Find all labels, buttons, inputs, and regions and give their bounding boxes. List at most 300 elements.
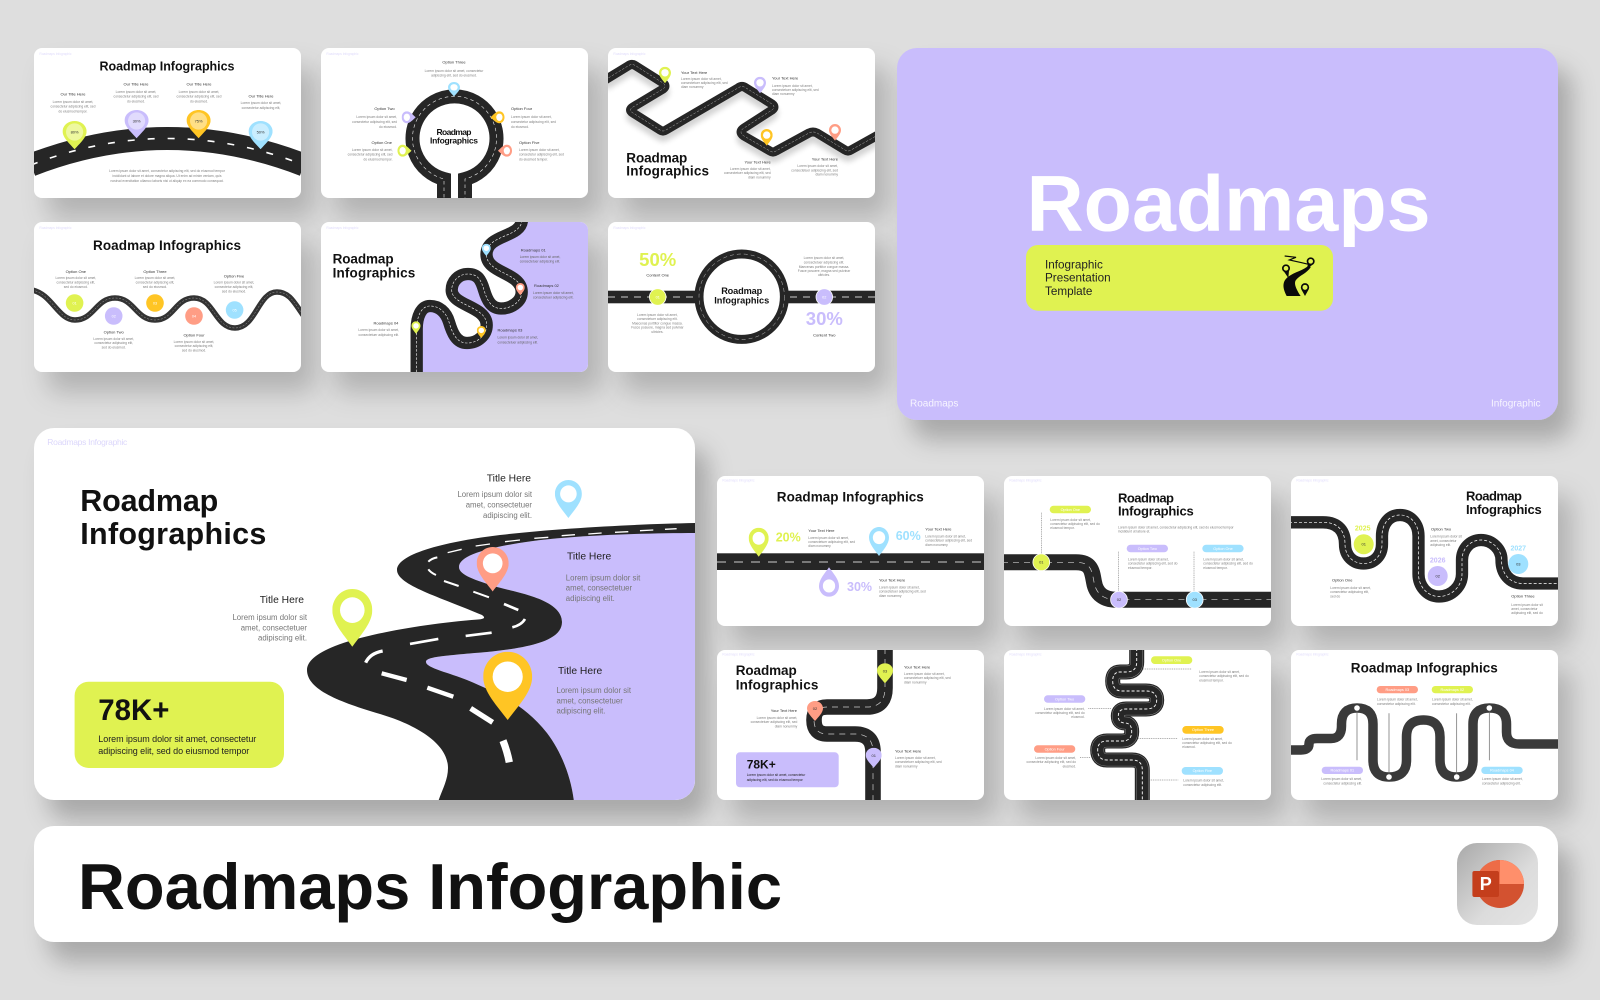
body text left: Fusce posuere, magna sed pulvinar bbox=[631, 326, 685, 330]
text two: diam nonummy bbox=[772, 92, 795, 96]
text left: consectetuer adipiscing elit, sed bbox=[751, 720, 797, 724]
roadmaps 02: Roadmaps 02 bbox=[534, 283, 560, 288]
option two: adipiscing elit. bbox=[1430, 543, 1451, 547]
watermark: Roadmaps Infographic bbox=[613, 52, 646, 56]
option four: do eiusmod. bbox=[511, 125, 529, 129]
wave road bbox=[32, 290, 303, 328]
label two bbox=[114, 82, 159, 104]
label lime: Title Here bbox=[260, 595, 304, 606]
heading: Roadmap bbox=[626, 150, 687, 165]
option two: Lorem ipsum dolor sit amet, bbox=[1044, 707, 1085, 711]
heading bbox=[333, 251, 415, 281]
option three: consectetur adipiscing elit, bbox=[136, 280, 174, 284]
option three: Option Three bbox=[442, 60, 466, 65]
pin 01 bbox=[866, 748, 882, 768]
label top: Title Here bbox=[487, 474, 531, 484]
body text right bbox=[798, 256, 851, 277]
pin 01: 01 bbox=[871, 753, 877, 758]
body text right: Fusce posuere, magna sed pulvinar bbox=[798, 269, 851, 273]
option four: Lorem ipsum dolor sit amet, bbox=[511, 115, 552, 119]
subtitle text: Template bbox=[1045, 285, 1092, 298]
option two: Option Two bbox=[1055, 697, 1074, 701]
text three: Your Text Here bbox=[744, 159, 771, 164]
watermark: Roadmaps Infographic bbox=[326, 52, 359, 56]
subtitle text: Infographic bbox=[1045, 258, 1103, 272]
text four: diam nonummy bbox=[815, 172, 838, 176]
option five: Option Five bbox=[224, 273, 245, 278]
bottom paragraph: incididunt ut labore et dolore magna aliqua. Ut enim ad minim veniam, quis bbox=[112, 174, 222, 178]
option three: Option Three bbox=[1192, 728, 1214, 732]
option one: sed do bbox=[1330, 594, 1340, 598]
option one: Option One bbox=[1061, 508, 1080, 512]
option three: adipiscing elit, sed do bbox=[1511, 611, 1543, 615]
label three: do eiusmod. bbox=[190, 100, 208, 104]
text two: Your Text Here bbox=[772, 76, 799, 81]
option five: consectetur adipiscing elit, sed bbox=[519, 152, 564, 156]
text bottom right: diam nonummy bbox=[895, 764, 918, 768]
year 2026: 02 bbox=[1435, 573, 1441, 578]
option four: Option Four bbox=[511, 106, 533, 111]
pin 02 bbox=[807, 701, 823, 721]
pin coral bbox=[477, 547, 509, 592]
label four: consectetur adipiscing elit, bbox=[242, 106, 280, 110]
centre title: Infographics bbox=[714, 295, 769, 305]
stat box: Lorem ipsum dolor sit amet, consectetur bbox=[747, 773, 806, 777]
option four: Option Four bbox=[1045, 747, 1065, 751]
watermark: Roadmaps Infographic bbox=[722, 479, 755, 483]
roadmaps 02 bbox=[1432, 686, 1473, 706]
panel: serpentine road slide bbox=[1004, 648, 1271, 802]
option five: Option Five bbox=[519, 140, 540, 145]
heading: Roadmap bbox=[1118, 490, 1174, 505]
option three: Lorem ipsum dolor sit amet, consectetur bbox=[425, 69, 484, 73]
panel: s-bend road slide bbox=[1002, 476, 1273, 626]
body text right: consectetuer adipiscing elit. bbox=[804, 260, 844, 264]
option four: consectetur adipiscing elit, bbox=[175, 344, 213, 348]
option four bbox=[1027, 745, 1076, 768]
option two: Lorem ipsum dolor sit amet, bbox=[93, 337, 134, 341]
option one blue: consectetur adipiscing elit, sed do bbox=[1203, 562, 1253, 566]
heading: Roadmap Infographics bbox=[777, 490, 924, 505]
bottom paragraph: nostrud exercitation ullamco laboris nisi ut aliquip ex ea commodo consequat. bbox=[110, 179, 224, 183]
year 2025: 01 bbox=[1361, 542, 1367, 547]
option one bbox=[1151, 656, 1249, 682]
option three bbox=[1182, 726, 1232, 749]
heading: Roadmap bbox=[1466, 489, 1522, 504]
text one: consectetuer adipiscing elit, sed bbox=[681, 81, 728, 85]
stat 60%: Your Text Here bbox=[925, 527, 952, 532]
heading: Roadmap Infographics bbox=[93, 238, 241, 253]
heading: Roadmap bbox=[333, 251, 394, 266]
centre title: Infographics bbox=[430, 136, 478, 146]
step 03 bbox=[146, 294, 164, 312]
option one: Option One bbox=[372, 140, 393, 145]
option one bbox=[1330, 577, 1371, 598]
option two: Option Two bbox=[374, 106, 395, 111]
option one: Option One bbox=[66, 269, 87, 274]
marker 02: 02 bbox=[1117, 597, 1122, 602]
option three: eiusmod. bbox=[1182, 745, 1196, 749]
heading: Infographics bbox=[1118, 504, 1194, 519]
option one blue: Lorem ipsum dolor sit amet, bbox=[1203, 558, 1244, 562]
heading: Roadmap Infographics bbox=[1351, 660, 1498, 675]
option three: Lorem ipsum dolor sit bbox=[1511, 603, 1543, 607]
roadmaps 02: consectetur adipiscing elit. bbox=[1432, 702, 1471, 706]
option three bbox=[1511, 594, 1543, 615]
card background bbox=[1004, 476, 1271, 626]
year 2025 bbox=[1354, 526, 1374, 554]
purple area bbox=[417, 220, 590, 374]
roadmaps 04: Lorem ipsum dolor sit amet, bbox=[1482, 777, 1523, 781]
year 2027: 03 bbox=[1516, 561, 1521, 566]
option one: consectetur adipiscing elit, bbox=[56, 280, 95, 284]
label three: Our Title Here bbox=[187, 82, 212, 87]
text top right bbox=[904, 664, 951, 684]
option one: eiusmod tempor. bbox=[1050, 526, 1075, 530]
stat 20% bbox=[776, 528, 855, 548]
pin blue bbox=[448, 82, 460, 96]
step 05 bbox=[226, 301, 243, 319]
stat 60%: 60% bbox=[896, 529, 921, 543]
step 01: 01 bbox=[72, 301, 77, 305]
stat 60% bbox=[896, 527, 972, 547]
heading: Infographics bbox=[1466, 502, 1542, 517]
text left bbox=[751, 708, 798, 728]
stat 30%: Your Text Here bbox=[879, 577, 906, 582]
option two bbox=[352, 106, 397, 129]
roadmaps 04: consectetuer adipiscing elit. bbox=[358, 333, 399, 337]
stat 30% bbox=[847, 577, 926, 598]
label yellow: amet, consectetuer bbox=[556, 696, 623, 705]
card background bbox=[34, 222, 301, 372]
roadmaps 02: Lorem ipsum dolor sit amet, bbox=[533, 291, 574, 295]
option one: consectetur adipiscing elit, bbox=[1330, 590, 1369, 594]
cover background bbox=[897, 48, 1558, 420]
option three: Lorem ipsum dolor sit amet, bbox=[1182, 737, 1223, 741]
text three: consectetuer adipiscing elit, sed bbox=[724, 171, 771, 175]
panel: purple stat road slide bbox=[717, 648, 984, 802]
stat 30%: consectetuer adipiscing elit, sed bbox=[879, 590, 926, 594]
guide lines bbox=[1041, 513, 1194, 592]
marker 02: 02 bbox=[822, 295, 826, 299]
year 2026 bbox=[1428, 558, 1448, 586]
icon: PowerPoint: P bbox=[1480, 874, 1492, 894]
connector lines bbox=[1080, 669, 1192, 780]
option three: amet, consectetur bbox=[1511, 607, 1538, 611]
option one: Lorem ipsum dolor sit amet, bbox=[1050, 518, 1091, 522]
stat 30%: 30% bbox=[806, 308, 843, 329]
option five: Option Five bbox=[1193, 769, 1212, 773]
heading: Infographics bbox=[736, 677, 818, 692]
option one: Lorem ipsum dolor sit amet, bbox=[55, 276, 96, 280]
label coral: amet, consectetuer bbox=[566, 584, 633, 593]
marker lines bbox=[1357, 707, 1489, 777]
stat 20%: diam nonummy bbox=[808, 544, 831, 548]
bottom paragraph: Lorem ipsum dolor sit amet, consectetur adipiscing elit, sed do eiusmod tempor bbox=[109, 169, 226, 173]
roadmaps 04: Roadmaps 04 bbox=[373, 320, 399, 325]
icon: road with pins bbox=[1283, 256, 1314, 296]
pin 75%: 75% bbox=[195, 119, 203, 124]
option three: consectetur adipiscing elit, sed do bbox=[1182, 741, 1232, 745]
intro text bbox=[1118, 526, 1235, 534]
pin 50%: 50% bbox=[257, 130, 265, 135]
card background bbox=[34, 48, 301, 198]
option two: Lorem ipsum dolor sit bbox=[1430, 534, 1462, 538]
heading bbox=[80, 484, 266, 551]
label yellow: Title Here bbox=[558, 666, 603, 677]
panel: zigzag road slide bbox=[605, 48, 878, 198]
step 01 bbox=[66, 294, 83, 312]
stat box: 78K+ bbox=[747, 757, 776, 771]
watermark: Roadmaps Infographic bbox=[1009, 653, 1042, 657]
text left: diam nonummy bbox=[775, 724, 798, 728]
pin lime bbox=[397, 145, 412, 157]
stat 60%: Lorem ipsum dolor sit amet, bbox=[925, 534, 966, 538]
option three: Option Three bbox=[143, 269, 167, 274]
label yellow: adipiscing elit. bbox=[556, 707, 605, 716]
subtitle text bbox=[1045, 258, 1111, 298]
body text right: Maecenas porttitor congue massa. bbox=[799, 265, 849, 269]
stat box: 78K+ bbox=[98, 694, 169, 727]
option one: Lorem ipsum dolor sit amet, bbox=[1330, 586, 1371, 590]
option two: Lorem ipsum dolor sit amet, bbox=[1128, 558, 1169, 562]
pin coral bbox=[498, 145, 512, 157]
pin blue bbox=[482, 244, 491, 256]
heading: Roadmap bbox=[736, 663, 797, 678]
card background bbox=[608, 222, 875, 372]
marker 03 bbox=[1186, 591, 1203, 608]
pin 80%: 80% bbox=[71, 130, 79, 135]
card background bbox=[1004, 650, 1271, 800]
option two: consectetur adipiscing elit, sed do bbox=[1128, 562, 1178, 566]
heading bbox=[626, 150, 709, 179]
roadmaps 03 bbox=[498, 328, 538, 344]
option two: Option Two bbox=[104, 330, 125, 335]
watermark: Roadmaps Infographic bbox=[1296, 479, 1329, 483]
card background bbox=[321, 222, 588, 372]
option one: sed do eiusmod. bbox=[64, 285, 88, 289]
stat box: adipiscing elit, sed do eiusmod tempor bbox=[747, 778, 804, 782]
option four: sed do eiusmod. bbox=[182, 348, 206, 352]
step 02: 02 bbox=[112, 314, 116, 318]
option five: sed do eiusmod. bbox=[222, 290, 246, 294]
panel: winding road on purple slide bbox=[321, 220, 590, 374]
text bottom right: consectetuer adipiscing elit, sed bbox=[895, 760, 942, 764]
option two: consectetur adipiscing elit, sed bbox=[352, 120, 397, 124]
panel: switchback road slide bbox=[1289, 650, 1560, 800]
card background bbox=[717, 476, 984, 626]
pin yellow bbox=[490, 111, 505, 123]
heading bbox=[1466, 489, 1542, 517]
watermark: Roadmaps Infographic bbox=[722, 653, 755, 657]
pin yellow bbox=[483, 652, 532, 720]
roadmaps 03: Roadmaps 03 bbox=[1385, 688, 1409, 692]
pin 02: 02 bbox=[813, 706, 818, 711]
body text left: ultricies. bbox=[651, 330, 664, 334]
text one: Your Text Here bbox=[681, 70, 708, 75]
label top: adipiscing elit. bbox=[483, 511, 532, 520]
text two bbox=[772, 76, 819, 96]
pin lime bbox=[749, 528, 769, 557]
roadmaps 04: consectetur adipiscing elit. bbox=[1482, 782, 1521, 786]
label lime: amet, consectetuer bbox=[241, 623, 307, 632]
marker 02 bbox=[1111, 591, 1127, 608]
stat 30%: Lorem ipsum dolor sit amet, bbox=[879, 586, 920, 590]
option five bbox=[519, 140, 564, 162]
option one bbox=[348, 140, 393, 162]
label top bbox=[457, 474, 533, 520]
marker 01: 01 bbox=[656, 295, 660, 299]
roadmaps 02 bbox=[533, 283, 574, 300]
roadmaps 01: Lorem ipsum dolor sit amet, bbox=[1321, 777, 1362, 781]
marker 01 bbox=[1033, 554, 1050, 571]
panel: arc road slide bbox=[31, 48, 304, 198]
heading: Infographics bbox=[80, 517, 266, 551]
road dashes bbox=[366, 529, 677, 762]
year 2027 bbox=[1508, 546, 1528, 574]
roadmaps 04 bbox=[358, 320, 399, 337]
s-bend road bbox=[1002, 562, 1273, 600]
label two: Our Title Here bbox=[124, 82, 149, 87]
centre title: Roadmap bbox=[436, 127, 472, 137]
roadmaps 03 bbox=[1377, 686, 1418, 706]
zigzag road bbox=[605, 64, 878, 158]
straight road bbox=[717, 553, 984, 570]
body text left: Lorem ipsum dolor sit amet, bbox=[637, 313, 678, 317]
pin 30%: 30% bbox=[133, 119, 141, 124]
pin 03: 03 bbox=[883, 668, 888, 673]
option two: do eiusmod. bbox=[379, 125, 397, 129]
option two: consectetur adipiscing elit, sed do bbox=[1035, 711, 1085, 715]
card background bbox=[608, 48, 875, 198]
banner background bbox=[34, 826, 1558, 942]
stat 20%: 20% bbox=[776, 530, 801, 544]
option three: sed do eiusmod. bbox=[143, 285, 167, 289]
option two: Lorem ipsum dolor sit amet, bbox=[356, 115, 397, 119]
text left: Your Text Here bbox=[771, 708, 798, 713]
cover title: Roadmaps bbox=[1027, 159, 1431, 248]
roadmaps 03: Roadmaps 03 bbox=[498, 328, 523, 333]
label top: Lorem ipsum dolor sit bbox=[457, 490, 533, 499]
roadmaps 01 bbox=[520, 247, 560, 264]
heading bbox=[736, 663, 818, 692]
label three bbox=[177, 82, 222, 104]
heading bbox=[1118, 490, 1194, 519]
pin purple bbox=[754, 77, 766, 93]
text three: Lorem ipsum dolor sit amet, bbox=[730, 167, 771, 171]
option one bbox=[55, 269, 96, 289]
pin 75% bbox=[187, 110, 211, 138]
option one: consectetur adipiscing elit, sed do bbox=[1050, 522, 1100, 526]
label one: consectetur adipiscing elit, sed bbox=[51, 104, 96, 108]
label coral: adipiscing elit. bbox=[566, 594, 615, 603]
roadmaps 01: consectetuer adipiscing elit. bbox=[520, 260, 560, 264]
option four: consectetur adipiscing elit, sed bbox=[511, 120, 556, 124]
option one bbox=[1050, 506, 1100, 530]
label four: Lorem ipsum dolor sit amet, bbox=[241, 101, 281, 105]
stat 30%: diam nonummy bbox=[879, 594, 902, 598]
text top right: consectetuer adipiscing elit, sed bbox=[904, 676, 951, 680]
pin blue bbox=[555, 480, 582, 518]
step 05: 05 bbox=[232, 308, 237, 312]
year 2027: 2027 bbox=[1511, 546, 1526, 553]
stat 20%: Your Text Here bbox=[808, 528, 835, 533]
option two bbox=[1035, 695, 1085, 719]
watermark: Roadmaps Infographic bbox=[39, 52, 72, 56]
step 03: 03 bbox=[153, 301, 157, 305]
option two: eiusmod tempor. bbox=[1128, 566, 1153, 570]
footer right: Infographic bbox=[1491, 398, 1540, 410]
option one: Lorem ipsum dolor sit amet, bbox=[352, 148, 393, 152]
subtitle text: Presentation bbox=[1045, 272, 1111, 285]
text left: Lorem ipsum dolor sit amet, bbox=[757, 716, 797, 720]
option five bbox=[1182, 767, 1224, 787]
option one blue: Option One bbox=[1213, 547, 1233, 551]
option one: Option One bbox=[1332, 577, 1353, 582]
centre title bbox=[714, 286, 769, 305]
roadmaps 03: Lorem ipsum dolor sit amet, bbox=[1377, 698, 1418, 702]
pin lime bbox=[659, 67, 671, 83]
text bottom right bbox=[895, 748, 942, 768]
winding road bbox=[417, 220, 522, 374]
option four: eiusmod. bbox=[1063, 764, 1076, 768]
option two bbox=[1430, 526, 1462, 547]
text four: consectetuer adipiscing elit, sed bbox=[791, 168, 838, 172]
option four: consectetur adipiscing elit, sed do bbox=[1027, 760, 1076, 764]
text two: Lorem ipsum dolor sit amet, bbox=[772, 84, 813, 88]
icon: PowerPoint bbox=[1457, 843, 1538, 925]
text one bbox=[681, 70, 728, 89]
pin coral bbox=[516, 283, 525, 295]
option five: Lorem ipsum dolor sit amet, bbox=[1183, 778, 1224, 782]
step 04 bbox=[185, 307, 203, 325]
heading: Infographics bbox=[626, 164, 709, 179]
panel: circle road slide bbox=[608, 222, 875, 372]
arched road bbox=[31, 138, 304, 165]
option three bbox=[135, 269, 175, 289]
option five: Lorem ipsum dolor sit amet, bbox=[519, 148, 560, 152]
roadmaps 03: consectetur adipiscing elit. bbox=[1377, 702, 1416, 706]
stat 60%: diam nonummy bbox=[925, 543, 948, 547]
option one: consectetur adipiscing elit, sed bbox=[348, 152, 393, 156]
bending road bbox=[814, 648, 885, 802]
card background bbox=[34, 428, 695, 800]
stat box: adipiscing elit, sed do eiusmod tempor bbox=[98, 746, 249, 756]
option five: Lorem ipsum dolor sit amet, bbox=[214, 280, 254, 284]
serpentine road bbox=[1098, 648, 1157, 802]
purple area bbox=[426, 530, 700, 802]
option two bbox=[1127, 545, 1178, 570]
option three: Lorem ipsum dolor sit amet, bbox=[135, 276, 175, 280]
panel: year road slide bbox=[1289, 476, 1560, 626]
option two: eiusmod. bbox=[1071, 715, 1085, 719]
label coral bbox=[566, 552, 641, 603]
text four: Your Text Here bbox=[812, 156, 839, 161]
watermark: Roadmaps Infographic bbox=[39, 226, 72, 230]
label two: consectetur adipiscing elit, sed bbox=[114, 94, 159, 98]
label lime bbox=[232, 595, 308, 643]
pin 30% bbox=[125, 110, 149, 138]
pin purple inverted bbox=[819, 567, 839, 597]
step 04: 04 bbox=[192, 314, 196, 318]
step 02 bbox=[105, 307, 122, 325]
text bottom right: Your Text Here bbox=[895, 748, 922, 753]
option one: Lorem ipsum dolor sit amet, bbox=[1199, 670, 1240, 674]
heading: Infographics bbox=[333, 266, 415, 281]
roadmaps 01 bbox=[1321, 767, 1363, 786]
option five: consectetur adipiscing elit. bbox=[1183, 783, 1222, 787]
card background bbox=[1291, 476, 1558, 626]
